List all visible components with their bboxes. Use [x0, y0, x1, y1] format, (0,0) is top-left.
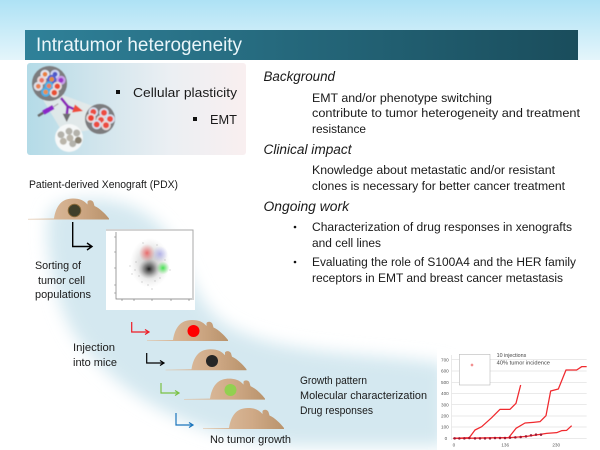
arrow: black population: [147, 353, 164, 366]
icon: mouse without tumor: [203, 408, 284, 429]
axis labels: 600: [441, 369, 449, 374]
growth lines: [453, 367, 587, 438]
axis labels: 0: [453, 443, 456, 448]
panel: cellular plasticity: [27, 63, 246, 155]
bullet: EMT: [193, 112, 237, 127]
label: no tumor growth: No tumor growth: [210, 434, 291, 446]
axis labels: 300: [441, 402, 449, 407]
label: patient-derived xenograft: Patient-derived Xenograft (PDX): [29, 179, 178, 191]
axis labels: 0: [445, 436, 448, 441]
text: clinical impact: Clinical impact: [264, 142, 353, 157]
icon: mouse with green tumor: [184, 379, 265, 400]
text: background: resistance: [312, 122, 366, 136]
arrow: red population: [132, 322, 149, 334]
text: background: Background: [264, 69, 335, 84]
label: sorting of tumor cell populations: Sorting of: [35, 260, 82, 272]
label: injection into mice: Injection: [73, 342, 115, 354]
icon: mouse with black tumor: [166, 349, 246, 370]
text: ongoing work: [264, 199, 577, 285]
axis labels: 500: [441, 380, 449, 385]
icon: tumor cell clusters and drug treatment: [32, 66, 115, 152]
inset caption: 10 injections: [497, 353, 527, 359]
text: ongoing work: and cell lines: [312, 236, 381, 250]
blue swoosh background: [48, 199, 445, 446]
bullet: cellular plasticity: Cellular plasticity: [133, 85, 237, 100]
label: sorting of tumor cell populations: [35, 260, 91, 301]
axis labels: 230: [552, 443, 561, 448]
axis labels: 400: [441, 391, 449, 396]
text: ongoing work: Ongoing work: [264, 199, 350, 214]
text: growth readouts: Drug responses: [300, 405, 373, 417]
top background band: [0, 0, 600, 60]
data markers: [453, 433, 542, 440]
inset caption: [497, 353, 550, 366]
label: sorting of tumor cell populations: tumor cell: [38, 275, 85, 287]
text: clinical impact: Knowledge about metastatic and/or resistant: [312, 163, 556, 177]
axis labels: 100: [441, 425, 449, 430]
bullet: EMT: EMT: [210, 112, 237, 127]
arrow: green population: [161, 383, 179, 396]
icon: mouse with red tumor: [147, 320, 228, 341]
axis labels: [441, 357, 561, 448]
arrow: to sorting: [73, 222, 92, 250]
inset plot: [459, 354, 490, 385]
title bar: [25, 30, 578, 60]
axis labels: 200: [441, 414, 449, 419]
inset caption: 40% tumor incidence: [497, 360, 550, 366]
label: injection into mice: into mice: [73, 357, 117, 369]
chart: tumor growth curves: [437, 349, 600, 450]
text: ongoing work: receptors in EMT and breast cancer metastasis: [312, 271, 563, 285]
text: background: [264, 69, 581, 136]
text: growth readouts: Molecular characterization: [300, 390, 427, 402]
axis labels: 136: [501, 443, 510, 448]
text: ongoing work: Characterization of drug responses in xenografts: [312, 220, 572, 234]
label: injection into mice: [73, 342, 117, 369]
text: growth readouts: [300, 375, 427, 417]
text: clinical impact: clones is necessary for better cancer treatment: [312, 179, 566, 193]
text: ongoing work: Evaluating the role of S100A4 and the HER family: [312, 255, 577, 269]
label: sorting of tumor cell populations: populations: [35, 289, 91, 301]
icon: PDX mouse with tumor: [28, 198, 109, 220]
text: clinical impact: [264, 142, 566, 193]
text: background: contribute to tumor heterogeneity and treatment: [312, 106, 581, 120]
text: background: EMT and/or phenotype switching: [312, 91, 492, 105]
title: Intratumor heterogeneity: [36, 34, 242, 56]
axis labels: 700: [441, 357, 449, 362]
chart: flow cytometry scatter plot: [106, 229, 195, 310]
text: growth readouts: Growth pattern: [300, 375, 367, 387]
arrow: blue population: [176, 413, 193, 428]
